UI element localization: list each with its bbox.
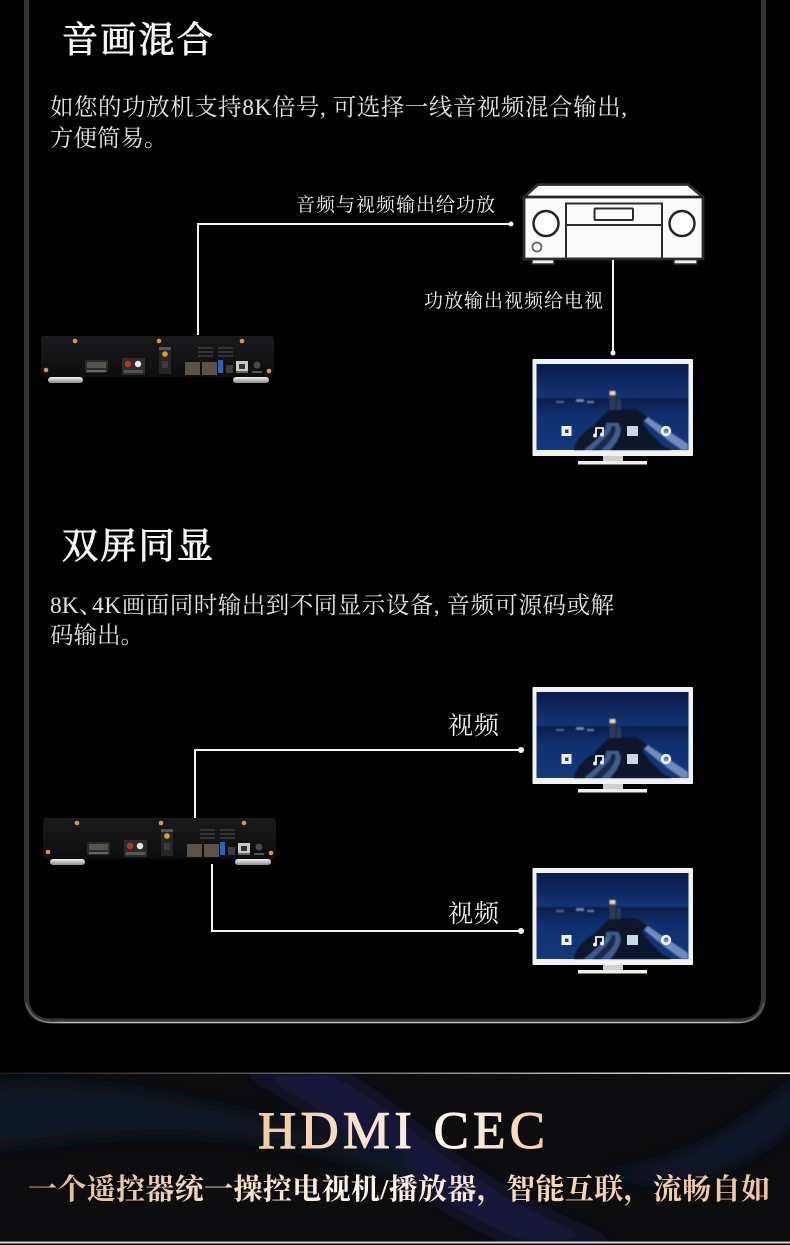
label: video upper: 视频 (448, 712, 500, 740)
banner subtitle: 一个遥控器统一操控电视机/播放器，智能互联，流畅自如 (28, 1173, 770, 1206)
text block: dual display description: 码输出。 (50, 622, 144, 649)
text block: mixed output description: 方便简易。 (50, 125, 168, 152)
arrow: player to upper TV (195, 747, 524, 818)
banner: HDMI CEC (0, 1070, 790, 1245)
device: TV (532, 359, 693, 464)
text block: dual display description: 8K (50, 593, 79, 619)
icon: AV amplifier (524, 184, 703, 264)
text block: dual display description (50, 592, 614, 649)
text block: dual display description: 、 (79, 593, 102, 619)
device: player rear panel second (43, 817, 276, 865)
device: TV upper (532, 687, 693, 792)
label: audio and video output to amplifier: 音频与视频输出给功放 (296, 194, 495, 216)
label: amplifier outputs video to TV: 功放输出视频给电视 (424, 290, 603, 312)
device: TV lower (532, 868, 693, 974)
text block: dual display description: 4K画面同时输出到不同显示设备, 音频可源码或解 (92, 592, 614, 619)
arrow: player to lower TV (212, 864, 524, 934)
arrow: amplifier to TV (610, 260, 616, 356)
device: player rear panel (41, 335, 274, 383)
rounded content panel frame (26, 0, 764, 1022)
heading: 音画混合: 音画混合 (62, 20, 213, 60)
text block: mixed output description (50, 94, 627, 152)
heading: 双屏同显: 双屏同显 (62, 526, 213, 566)
label: video lower: 视频 (448, 900, 500, 928)
banner title: HDMI CEC (258, 1102, 545, 1160)
arrow: player to amplifier (198, 222, 514, 335)
text block: mixed output description: 如您的功放机支持8K倍号, 可选择一线音视频混合输出, (50, 94, 627, 121)
